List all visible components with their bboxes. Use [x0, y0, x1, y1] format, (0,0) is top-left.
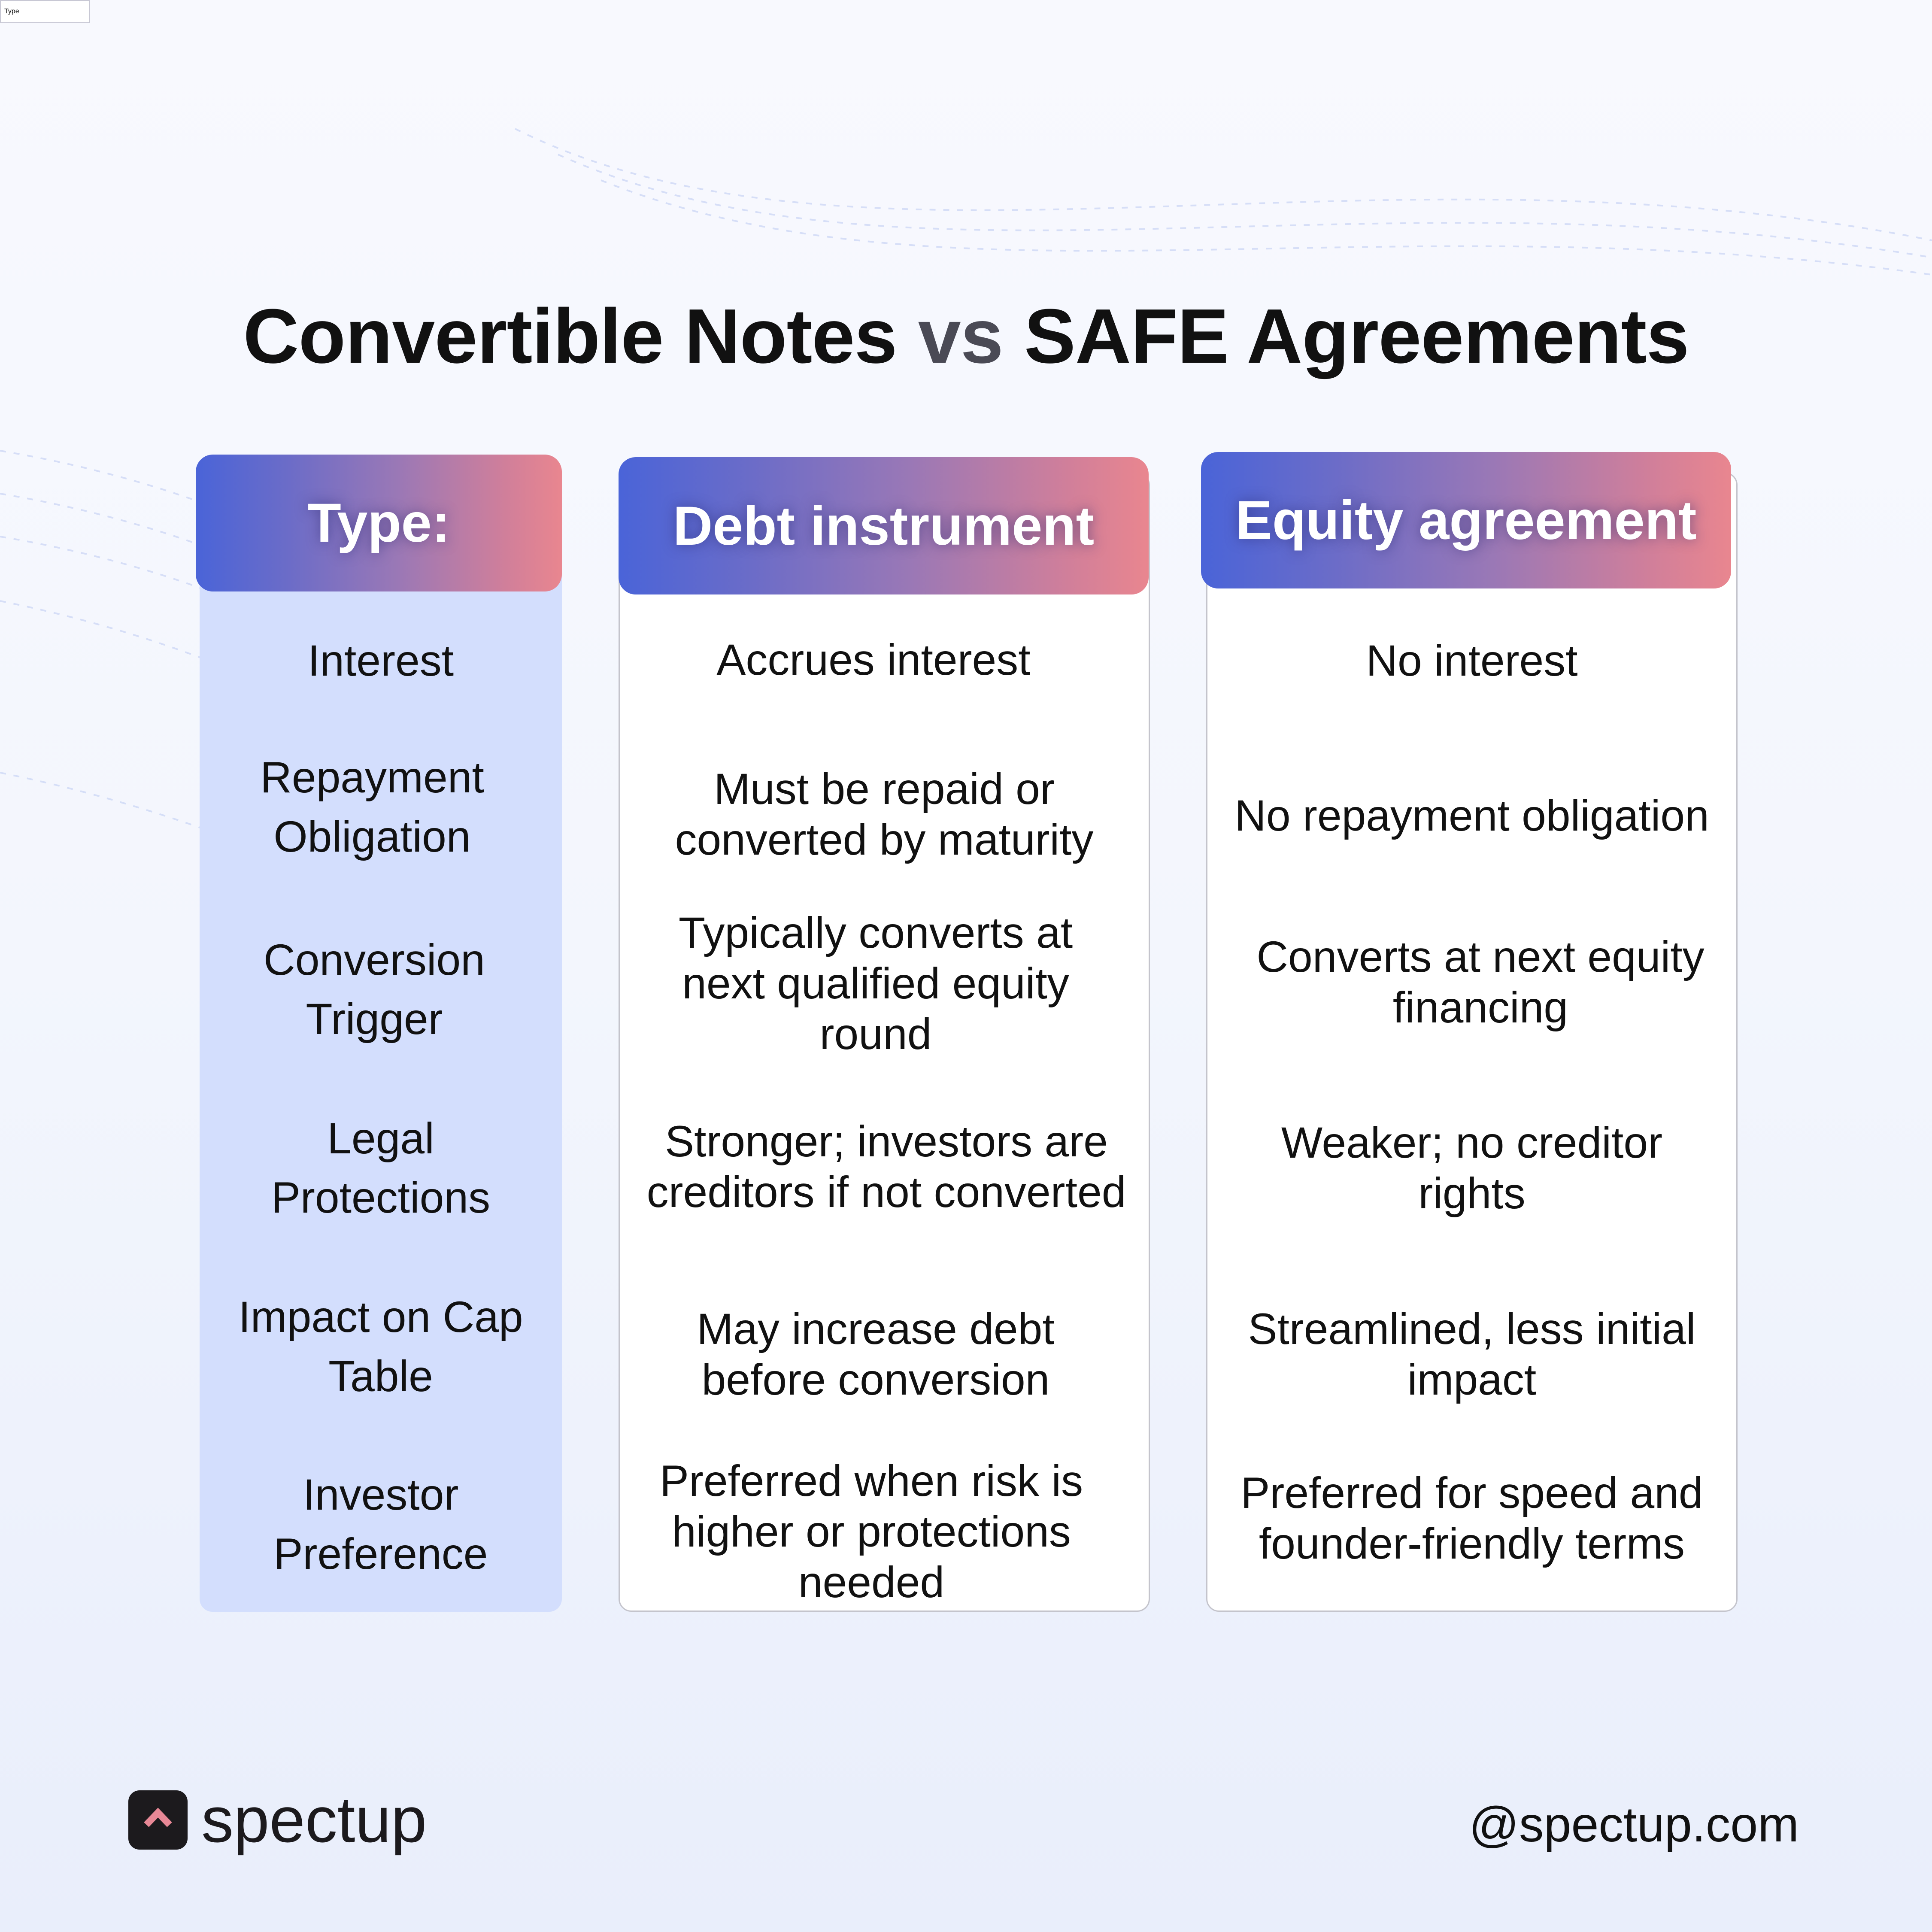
equity cells: impact — [1407, 1355, 1536, 1404]
header: debt instrument: Debt instrument — [673, 495, 1094, 556]
row labels: Protections — [271, 1173, 490, 1222]
debt cells: May increase debt — [697, 1304, 1055, 1353]
row labels: Conversion — [264, 935, 485, 984]
equity cells: Preferred for speed and — [1240, 1468, 1703, 1517]
equity cells: Streamlined, less initial — [1248, 1304, 1696, 1353]
debt cells: round — [820, 1010, 931, 1059]
equity cells: Weaker; no creditor — [1281, 1118, 1662, 1167]
header: type — [196, 455, 562, 591]
row labels: Interest — [308, 636, 454, 685]
header: type: Type: — [308, 492, 450, 554]
handle: @spectup.com — [1469, 1797, 1799, 1852]
debt cells: Typically converts at — [679, 908, 1073, 957]
row labels: Obligation — [273, 812, 471, 861]
debt cells: Accrues interest — [716, 635, 1031, 684]
header: equity agreement: Equity agreement — [1235, 489, 1697, 551]
title: Convertible Notes vs SAFE Agreements — [243, 293, 1689, 379]
row labels: Investor — [303, 1470, 458, 1519]
row labels: Preference — [274, 1529, 488, 1578]
panel: SAFE column — [1206, 472, 1738, 1612]
logo — [128, 1789, 429, 1849]
debt cells: higher or protections — [672, 1507, 1071, 1556]
logo text: spectup — [201, 1783, 427, 1856]
debt cells: converted by maturity — [675, 815, 1094, 864]
equity cells: financing — [1393, 983, 1568, 1032]
debt cells: next qualified equity — [682, 959, 1069, 1008]
header: equity agreement — [1201, 452, 1731, 588]
small type box: Type — [4, 8, 19, 15]
row labels: Repayment — [260, 753, 484, 802]
row labels — [200, 0, 562, 1932]
debt cells: needed — [798, 1558, 944, 1607]
icon: logo mark — [128, 1790, 188, 1850]
row labels: Table — [328, 1352, 433, 1401]
small type box — [0, 0, 90, 23]
debt cells: creditors if not converted — [647, 1168, 1126, 1216]
row labels: Impact on Cap — [238, 1292, 523, 1341]
panel: convertible notes column — [619, 472, 1150, 1612]
row labels: Legal — [327, 1114, 434, 1163]
equity cells: founder-friendly terms — [1259, 1519, 1685, 1568]
debt cells — [619, 0, 1150, 1932]
debt cells: Preferred when risk is — [660, 1456, 1083, 1505]
equity cells: No repayment obligation — [1234, 791, 1709, 840]
debt cells: Stronger; investors are — [665, 1117, 1108, 1166]
debt cells: Must be repaid or — [714, 764, 1055, 813]
equity cells — [1206, 0, 1738, 1932]
panel: type column — [200, 472, 562, 1612]
equity cells: rights — [1418, 1169, 1526, 1218]
equity cells: No interest — [1366, 636, 1578, 685]
debt cells: before conversion — [702, 1355, 1049, 1404]
header: debt instrument — [619, 457, 1149, 594]
equity cells: Converts at next equity — [1256, 932, 1705, 981]
row labels: Trigger — [306, 995, 443, 1043]
